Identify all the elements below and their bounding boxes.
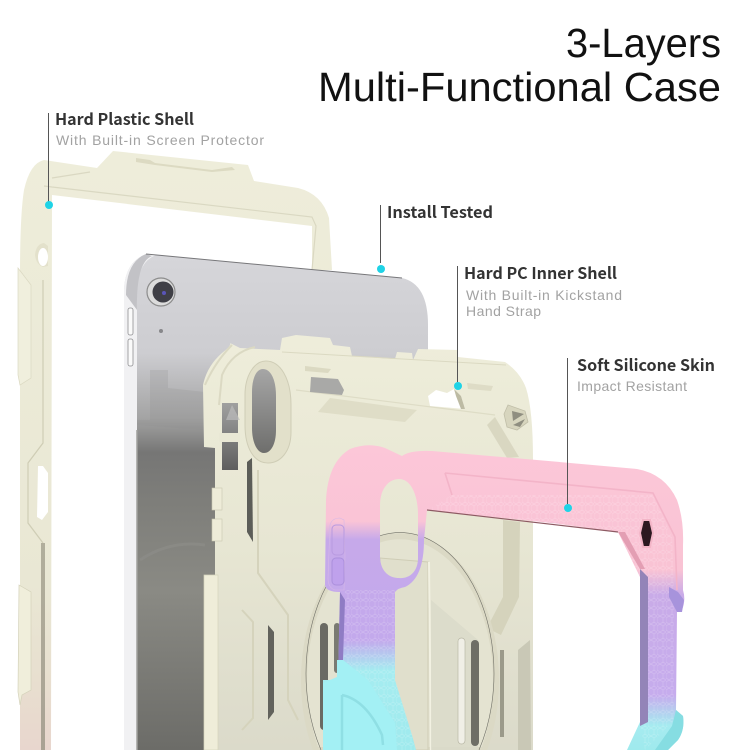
label: hard PC inner shell: With Built-in Kickstand [466,287,622,303]
frame inner lip shading [44,172,316,270]
purple side bump [669,587,684,612]
label: install tested [377,199,493,273]
title [318,20,721,110]
silicone inner side strip [640,569,648,726]
tablet reflection [137,370,205,430]
shell left windows [222,403,238,470]
silicone top band ridge [445,473,677,590]
label: install tested: Install Tested [387,199,493,223]
title: Multi-Functional Case [318,64,721,110]
tablet side buttons [128,308,133,335]
hard PC inner shell [203,335,533,750]
hard plastic shell frame [18,151,332,750]
title: 3-Layers [566,20,721,66]
label: hard plastic shell [45,106,264,209]
frame side buttons [18,268,31,385]
shell upper bars [318,398,417,422]
label: hard PC inner shell: Hard PC Inner Shell [464,260,617,284]
shell notches [305,366,331,373]
label: soft silicone skin: Soft Silicone Skin [577,352,715,376]
label: hard plastic shell: With Built-in Screen Protector [56,132,264,148]
shell left side channel [204,575,218,750]
frame side cut-outs [35,243,48,267]
shell right bracket [487,520,520,635]
tablet camera [147,278,175,306]
silicone left strip shadow [338,592,345,680]
frame top clip [136,158,235,172]
teal corner on right [655,710,683,750]
label: soft silicone skin: Impact Resistant [577,378,687,394]
frame upper groove [28,280,43,543]
tablet [124,254,428,750]
soft silicone skin [323,445,684,750]
silicone side button sleeves [328,518,345,590]
teal hand-strap panel [323,660,397,750]
silicone texture [343,495,674,750]
shell ridge line [296,390,495,415]
camera ring [245,361,291,463]
shell white cut-out [428,389,465,409]
shell corner bolt [504,405,528,430]
label: hard plastic shell: Hard Plastic Shell [55,106,194,130]
label: soft silicone skin [564,352,715,512]
label: hard PC inner shell [454,260,622,390]
shell shoulder fold [205,345,255,405]
shell panel ridges [242,470,298,730]
kickstand ellipse [304,533,496,750]
silicone hex hole [640,520,653,547]
label: hard PC inner shell: Hand Strap [466,303,541,319]
tablet silver edge [124,254,156,750]
